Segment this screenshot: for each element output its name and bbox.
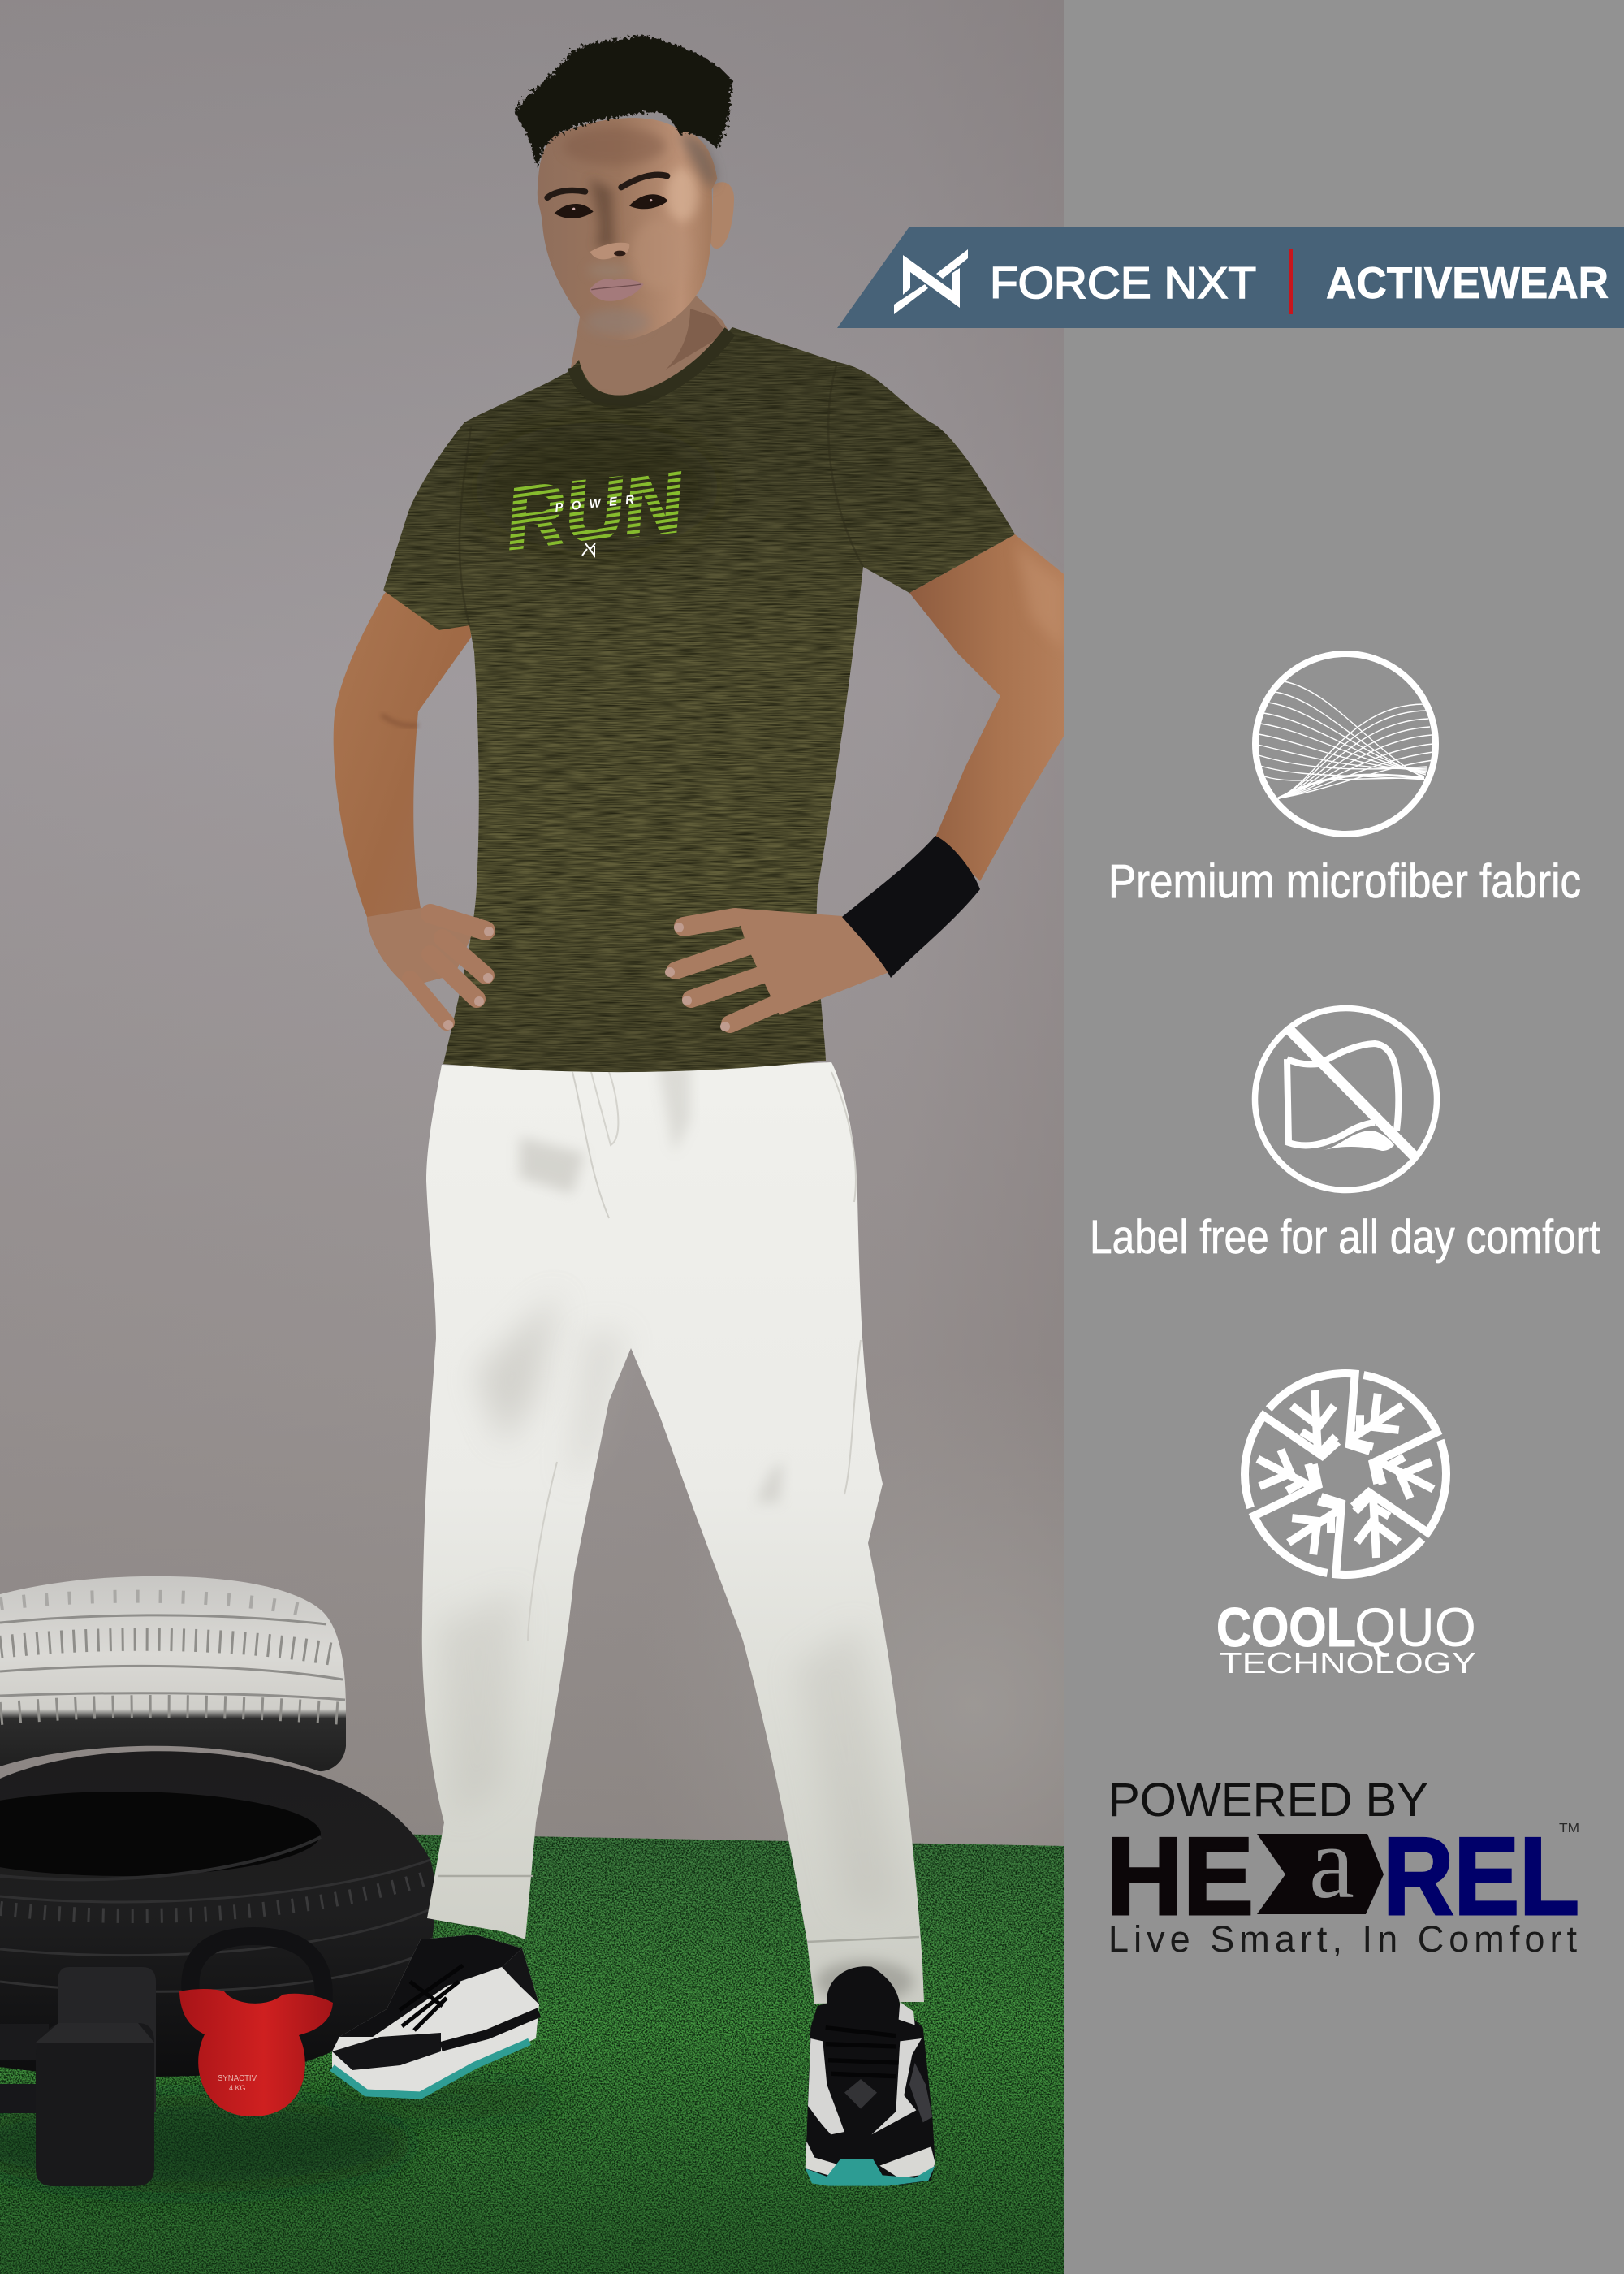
tagline: Live Smart, In Comfort — [1108, 1918, 1577, 1960]
category: ACTIVEWEAR — [1326, 257, 1609, 308]
Hexarel wordmark: a — [1309, 1807, 1354, 1920]
divider — [1289, 249, 1293, 314]
white painted tire — [0, 1576, 346, 1771]
RUN POWER chest print: RUN — [501, 452, 689, 568]
icon: Force NXT logo mark — [894, 249, 968, 314]
Hexarel wordmark: REL — [1383, 1814, 1579, 1938]
icon: crossed-out label — [1255, 1009, 1437, 1191]
man: left hand on hip — [367, 908, 494, 1030]
kettlebell — [179, 1936, 333, 2116]
brand banner — [837, 227, 1624, 328]
feature: CoolQuo technology — [1216, 1357, 1476, 1680]
CoolQuo wordmark: COOL — [1216, 1597, 1356, 1658]
brand name: FORCE NXT — [990, 257, 1256, 308]
tires stack — [0, 1576, 435, 2077]
feature: premium microfiber fabric — [1108, 654, 1581, 908]
CoolQuo wordmark — [1216, 1597, 1476, 1680]
Powered by Hexarel logo — [1106, 1774, 1579, 1960]
man: white trousers — [422, 1062, 924, 2004]
artificial turf floor — [0, 1831, 1064, 2274]
Hexarel wordmark: TM — [1559, 1822, 1579, 1835]
Hexarel wordmark — [1106, 1807, 1579, 1938]
man: right hand and wristband — [665, 836, 980, 1031]
icon: woven fibre circle — [1255, 654, 1436, 834]
feature: label free — [1090, 1009, 1600, 1264]
nose — [590, 243, 629, 259]
lips — [590, 279, 644, 301]
man: right arm — [909, 534, 1072, 881]
icon: snowflake wheel — [1220, 1357, 1471, 1591]
black tire — [0, 1751, 435, 2077]
RUN POWER chest print — [475, 422, 719, 568]
eyebrows — [547, 175, 667, 197]
panel: grey features column — [1064, 0, 1624, 2274]
man: olive t-shirt — [383, 327, 1015, 1072]
kettlebell: SYNACTIV — [218, 2074, 257, 2083]
man: left arm — [334, 581, 479, 987]
Hexarel wordmark: HE — [1106, 1814, 1254, 1938]
man: right shoe — [806, 1966, 935, 2186]
CoolQuo wordmark: TECHNOLOGY — [1220, 1646, 1476, 1680]
RUN POWER chest print: POWER — [555, 493, 635, 515]
face — [538, 118, 717, 340]
man: neck and head — [514, 35, 739, 414]
man: left shoe — [332, 1935, 539, 2095]
CoolQuo wordmark: QUO — [1354, 1597, 1476, 1658]
hair — [514, 35, 732, 168]
panel: photo background studio wall — [0, 0, 1064, 1846]
kettlebell: 4 KG — [229, 2084, 246, 2092]
wristband — [842, 836, 980, 978]
powered by caption: POWERED BY — [1108, 1774, 1428, 1827]
ear — [710, 182, 734, 249]
dumbbell — [0, 1967, 156, 2186]
eyes — [555, 204, 594, 218]
